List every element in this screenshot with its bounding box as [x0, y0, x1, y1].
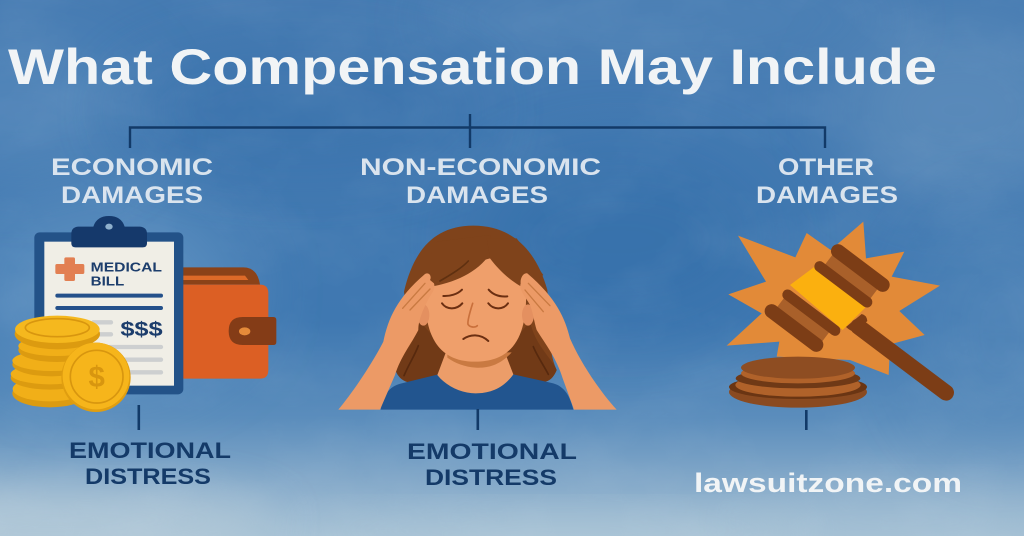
medical bill label: MEDICAL [91, 259, 162, 274]
icon: medical bill, wallet and coins [11, 216, 276, 412]
website label: lawsuitzone.com [694, 468, 962, 498]
label: emotional distress center: EMOTIONAL [407, 439, 577, 464]
amount symbols: $$$ [120, 318, 163, 341]
heading: economic damages: ECONOMIC [51, 154, 213, 181]
icon: wallet [180, 267, 276, 379]
shirt [381, 374, 573, 410]
heading: economic damages: DAMAGES [61, 182, 203, 209]
label: emotional distress center [407, 439, 577, 490]
title: What Compensation May Include [8, 39, 937, 95]
fringe [420, 235, 491, 287]
icon: woman with headache [338, 226, 617, 410]
icon: clipboard [34, 216, 183, 394]
heading: other damages [756, 154, 898, 209]
label: emotional distress left: DISTRESS [85, 464, 211, 489]
heading: other damages: DAMAGES [756, 182, 898, 209]
heading: non-economic damages [360, 154, 601, 209]
icon: coins: $ [89, 361, 105, 394]
neck [437, 348, 513, 393]
label: emotional distress center: DISTRESS [425, 465, 557, 490]
label: emotional distress left [69, 438, 231, 489]
icon: clipboard: BILL [91, 274, 124, 289]
starburst [727, 222, 940, 375]
heading: economic damages [51, 154, 213, 209]
connector: center [476, 409, 479, 430]
heading: other damages: OTHER [778, 154, 874, 181]
sound block [729, 357, 867, 408]
label: emotional distress left: EMOTIONAL [69, 438, 231, 463]
icon: medical cross [57, 259, 83, 279]
connector: left [138, 405, 140, 430]
facial features [442, 290, 508, 341]
gavel handle [858, 327, 946, 393]
connector: right [805, 410, 808, 430]
hair [395, 226, 557, 382]
face [425, 258, 526, 362]
icon: gavel on starburst [727, 222, 946, 408]
connector bracket [130, 114, 825, 148]
gavel head [762, 241, 892, 355]
heading: non-economic damages: NON-ECONOMIC [360, 154, 601, 181]
heading: non-economic damages: DAMAGES [406, 182, 548, 209]
arms and hands [338, 273, 434, 410]
icon: coins [11, 316, 131, 412]
